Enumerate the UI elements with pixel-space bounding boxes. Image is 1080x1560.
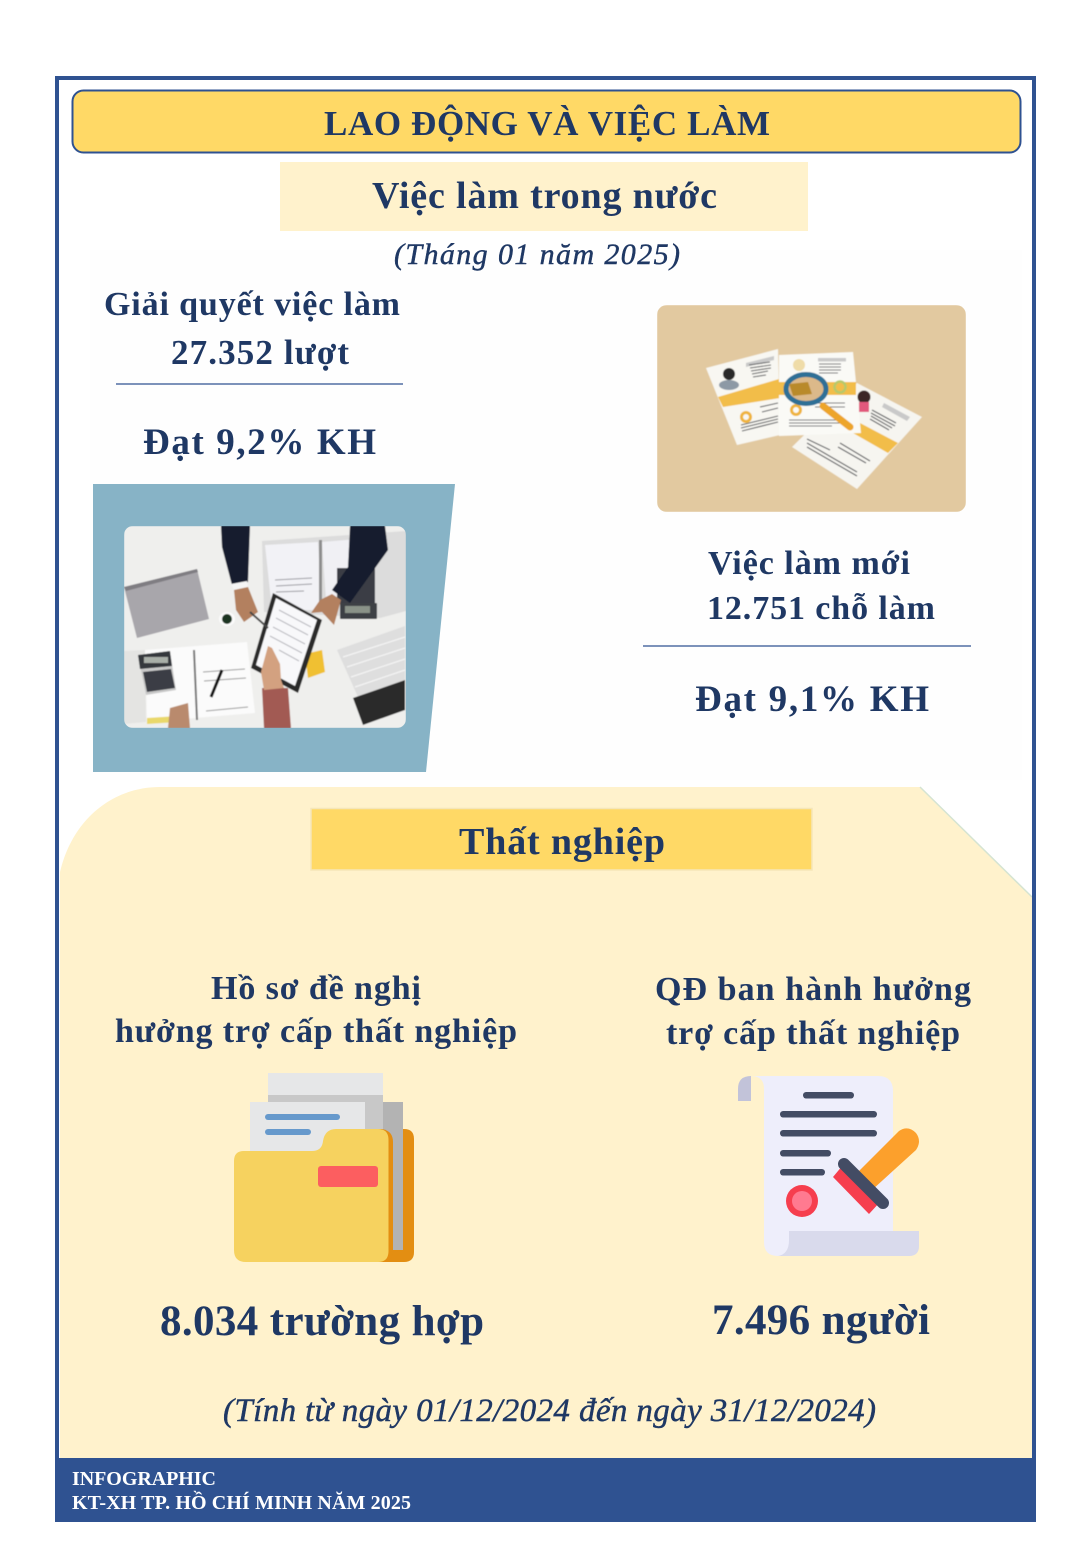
date range note: (Tính từ ngày 01/12/2024 đến ngày 31/12/2024) bbox=[223, 1393, 876, 1429]
footer: INFOGRAPHIC bbox=[72, 1468, 216, 1490]
heading: domestic jobs: Việc làm trong nước bbox=[372, 175, 717, 217]
image: CV documents with magnifying glass bbox=[657, 305, 966, 512]
stat label: unemployment benefit applications: Hồ sơ đề nghị bbox=[211, 970, 421, 1007]
stat: jobs resolved: Giải quyết việc làm bbox=[104, 286, 400, 323]
panel: unemployment background bbox=[60, 787, 1032, 1460]
icon: document with stamp bbox=[738, 1076, 919, 1256]
heading: unemployment bbox=[311, 808, 812, 870]
stat label: benefit decisions issued bbox=[655, 971, 971, 1052]
stat: jobs resolved: Đạt 9,2% KH bbox=[143, 422, 376, 463]
value: applications: 8.034 trường hợp bbox=[160, 1298, 484, 1345]
title banner bbox=[72, 90, 1020, 152]
stat: new jobs: Việc làm mới bbox=[708, 545, 910, 582]
title: LAO ĐỘNG VÀ VIỆC LÀM bbox=[324, 103, 770, 143]
stat: jobs resolved bbox=[104, 286, 403, 463]
stat: new jobs bbox=[643, 545, 971, 720]
stat label: benefit decisions issued: trợ cấp thất nghiệp bbox=[666, 1015, 960, 1052]
period note: (Tháng 01 năm 2025) bbox=[394, 238, 680, 271]
icon: folder with documents bbox=[234, 1073, 414, 1262]
footer bbox=[55, 1458, 1036, 1522]
stat label: unemployment benefit applications bbox=[115, 970, 517, 1050]
value: decisions: 7.496 người bbox=[712, 1297, 930, 1344]
stat label: unemployment benefit applications: hưởng trợ cấp thất nghiệp bbox=[115, 1013, 517, 1050]
stat: new jobs: 12.751 chỗ làm bbox=[707, 590, 935, 627]
heading: domestic jobs bbox=[280, 162, 808, 231]
footer: KT-XH TP. HỒ CHÍ MINH NĂM 2025 bbox=[72, 1490, 411, 1514]
stat: jobs resolved: 27.352 lượt bbox=[171, 333, 349, 372]
heading: unemployment: Thất nghiệp bbox=[459, 821, 665, 863]
stat: new jobs: Đạt 9,1% KH bbox=[695, 679, 929, 720]
stat label: benefit decisions issued: QĐ ban hành hưởng bbox=[655, 971, 971, 1008]
image: business meeting over documents bbox=[93, 484, 455, 772]
